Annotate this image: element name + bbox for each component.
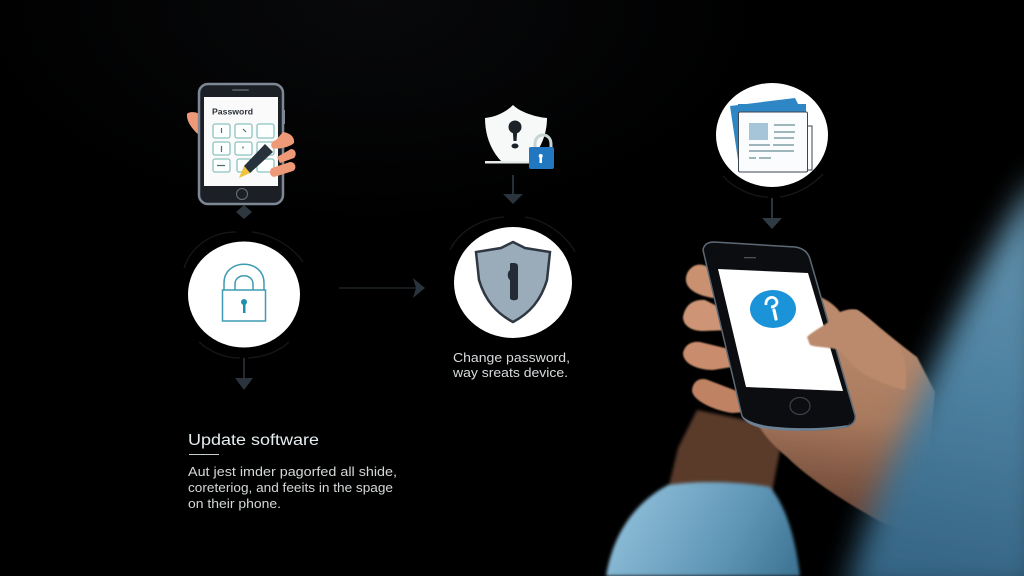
keypad <box>213 124 274 172</box>
caption: change password: way sreats device. <box>452 365 568 380</box>
phone with password keypad <box>187 84 296 204</box>
home button <box>790 398 810 414</box>
caption: change password <box>452 350 570 380</box>
phone screen <box>204 97 278 186</box>
arrow: shield icon to shield circle <box>503 175 523 204</box>
arrow: padlock to shield <box>339 278 425 298</box>
text block: update software: coreteriog, and feeits in the spage <box>188 480 393 495</box>
icon: shield with padlock <box>485 105 554 169</box>
text block: update software: on their phone. <box>188 496 281 511</box>
forearm <box>668 410 780 492</box>
thumb <box>807 310 906 390</box>
arrow: padlock to text <box>235 358 253 390</box>
blurred sleeve <box>606 482 800 576</box>
blue help badge <box>750 290 796 328</box>
text block: update software <box>188 432 397 511</box>
heading: Update software <box>188 432 319 449</box>
palm <box>742 295 935 530</box>
pencil <box>244 144 273 173</box>
icon circle: shield <box>450 217 575 338</box>
phone screen <box>718 269 843 391</box>
photo: hand holding phone <box>606 170 1024 576</box>
icon circle: documents <box>716 83 828 197</box>
caption: change password: Change password, <box>453 350 570 365</box>
icon: left hand fingertip <box>187 112 199 135</box>
fingers <box>683 265 745 413</box>
smartphone <box>703 242 855 431</box>
home button <box>236 188 248 200</box>
icon circle: padlock <box>184 232 303 358</box>
connector: diamond below phone <box>236 205 252 219</box>
arrow: documents to phone <box>762 198 782 229</box>
password label: Password <box>212 106 253 116</box>
phone body <box>199 84 283 204</box>
body text: Aut jest imder pagorfed all shide, <box>188 464 397 479</box>
blurred shoulder <box>845 170 1024 576</box>
fingers <box>270 132 296 177</box>
